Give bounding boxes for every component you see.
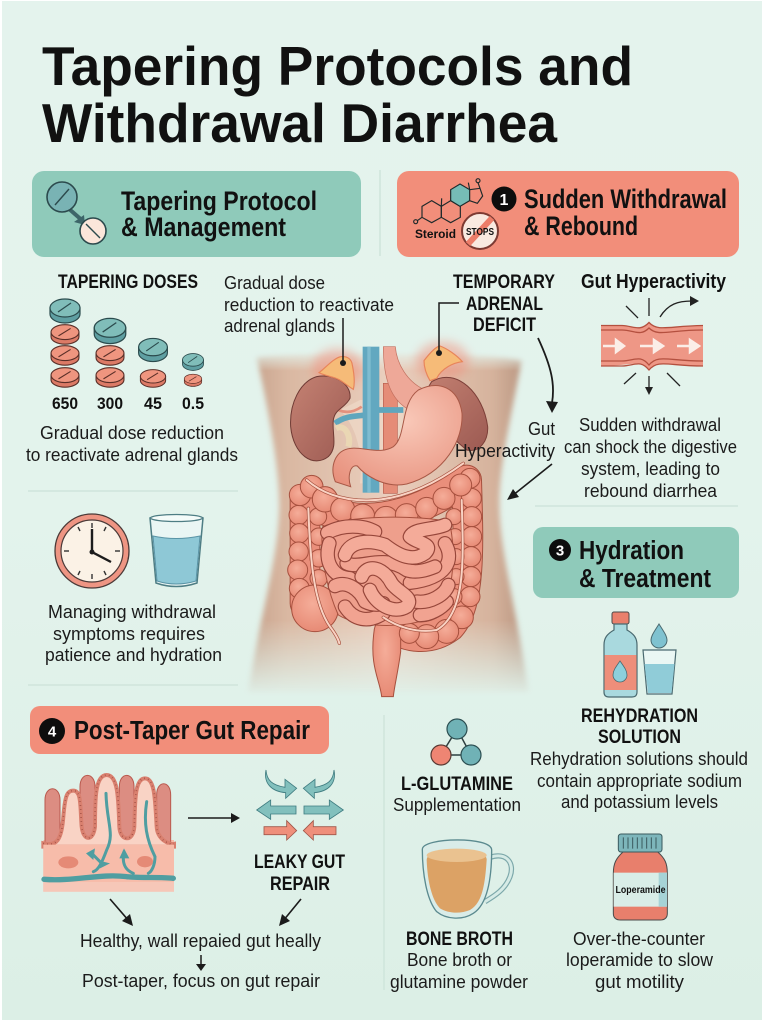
- leaky gut repair label: [254, 851, 345, 895]
- anatomy illustration: torso with organs: [248, 341, 528, 697]
- glutamine text: Supplementation: [393, 794, 521, 815]
- dose numbers: 300: [97, 394, 123, 413]
- bone broth text: Bone broth or: [407, 949, 512, 970]
- rehydration text: contain appropriate sodium: [537, 770, 742, 791]
- icon: hyperactive gut tube: [601, 296, 703, 395]
- title: Tapering Protocols and: [42, 35, 633, 97]
- heading text: [524, 184, 727, 241]
- rehydration text: REHYDRATION: [581, 706, 698, 727]
- dose numbers: [52, 394, 204, 413]
- withdrawal caption: [45, 601, 222, 665]
- caption: rebound diarrhea: [584, 480, 718, 501]
- caption: can shock the digestive: [564, 436, 737, 457]
- loperamide text: Over-the-counter: [573, 928, 705, 949]
- icon: rehydration bottle: [604, 612, 637, 697]
- label: gradual dose reduction: Gradual dose: [224, 272, 325, 293]
- number badge 3: [549, 539, 571, 561]
- rehydration text: Rehydration solutions should: [530, 748, 748, 769]
- withdrawal caption: patience and hydration: [45, 644, 222, 665]
- icon: repair arrows: [257, 770, 343, 840]
- heading text: Post-Taper Gut Repair: [74, 717, 310, 745]
- dose numbers: 45: [144, 394, 162, 413]
- blood vessels: [335, 347, 403, 493]
- bone broth text: glutamine powder: [390, 971, 528, 992]
- adrenal glands: [319, 346, 462, 389]
- heading: Gut Hyperactivity: [581, 271, 727, 293]
- icon: loperamide bottle: [613, 834, 667, 920]
- icon: pills shrinking: [47, 182, 106, 244]
- pill stacks: [50, 299, 204, 387]
- number badge 1: 1: [500, 192, 509, 209]
- heading text: Sudden Withdrawal: [524, 184, 727, 214]
- label: gut hyperactivity: [455, 418, 556, 461]
- number badge 4: 4: [48, 724, 57, 740]
- title: [42, 35, 633, 154]
- leaky gut repair label: LEAKY GUT: [254, 851, 345, 873]
- loperamide text: gut motility: [595, 971, 685, 992]
- bone broth text: BONE BROTH: [406, 929, 513, 950]
- number badge 3: 3: [556, 542, 564, 560]
- arrow: deficit to gut hyperactivity: [538, 338, 558, 413]
- arrow: to colon: [507, 464, 552, 500]
- leaky gut repair label: REPAIR: [270, 873, 330, 895]
- icon: glutamine molecule: [431, 719, 481, 765]
- panel header: hydration and treatment: [533, 527, 739, 598]
- arrow: villi to repair: [188, 813, 240, 823]
- heading text: & Treatment: [579, 565, 711, 593]
- panel: tapering doses: [26, 272, 238, 465]
- dose numbers: 0.5: [182, 394, 204, 413]
- taenia bands: [307, 463, 463, 643]
- arrow: down to focus: [196, 955, 206, 971]
- label: temporary adrenal deficit: [453, 271, 555, 336]
- stomach: [333, 386, 462, 487]
- icon: water glass: [150, 514, 203, 586]
- doses caption: [26, 422, 238, 465]
- rehydration text: SOLUTION: [598, 727, 681, 748]
- withdrawal caption: Managing withdrawal: [48, 601, 216, 622]
- esophagus: [383, 347, 425, 408]
- rehydration text: and potassium levels: [561, 791, 718, 812]
- caption: system, leading to: [581, 458, 720, 479]
- heading text: [579, 537, 711, 593]
- icon: glass and drop: [643, 624, 676, 694]
- small intestine: [322, 517, 453, 625]
- label: gradual dose reduction: [224, 272, 394, 336]
- colon: [288, 468, 482, 697]
- label: temporary adrenal deficit: DEFICIT: [473, 314, 536, 336]
- panel: gut hyperactivity: [564, 271, 737, 501]
- label: temporary adrenal deficit: TEMPORARY: [453, 271, 555, 293]
- icon: steroid stops: STOPS: [466, 227, 494, 238]
- doses caption: to reactivate adrenal glands: [26, 444, 238, 465]
- left kidney: [291, 376, 350, 461]
- label: temporary adrenal deficit: ADRENAL: [466, 293, 543, 315]
- icon: intestinal villi: [43, 775, 174, 892]
- heading text: & Rebound: [524, 211, 638, 241]
- icon: steroid stops: [414, 179, 498, 249]
- dose numbers: 650: [52, 394, 78, 413]
- panel: managing withdrawal: [45, 514, 222, 665]
- post-taper focus text: Post-taper, focus on gut repair: [82, 970, 320, 991]
- glutamine text: L-GLUTAMINE: [401, 774, 513, 795]
- label: gut hyperactivity: Hyperactivity: [455, 440, 556, 461]
- panel header: tapering protocol and management: [32, 171, 361, 257]
- leader line: left adrenal: [340, 318, 346, 366]
- caption: Sudden withdrawal: [579, 414, 721, 435]
- withdrawal caption: symptoms requires: [53, 623, 205, 644]
- bone broth text: [390, 929, 528, 992]
- healthy wall text: Healthy, wall repaied gut heally: [80, 930, 322, 951]
- arrows: to healthy wall: [110, 899, 301, 926]
- caption: [564, 414, 737, 501]
- icon: steroid stops: Steroid: [415, 227, 456, 241]
- label: gut hyperactivity: Gut: [528, 418, 555, 439]
- panel header: post-taper gut repair: [30, 706, 329, 754]
- heading text: Hydration: [579, 537, 684, 565]
- adrenal glow: [312, 341, 469, 388]
- number badge 4: [39, 718, 65, 744]
- doses heading: TAPERING DOSES: [58, 272, 198, 293]
- heading text: [121, 186, 317, 242]
- glutamine text: [393, 774, 521, 815]
- label: gradual dose reduction: adrenal glands: [224, 315, 335, 336]
- rehydration text: [530, 706, 748, 812]
- panel header: sudden withdrawal and rebound: [397, 171, 739, 257]
- loperamide text: [566, 928, 714, 992]
- icon: clock: [55, 514, 129, 588]
- title: Withdrawal Diarrhea: [42, 92, 557, 154]
- right kidney: [417, 377, 488, 451]
- doses caption: Gradual dose reduction: [40, 422, 224, 443]
- heading text: & Management: [121, 212, 286, 242]
- loperamide text: loperamide to slow: [566, 949, 714, 970]
- heading text: Tapering Protocol: [121, 186, 317, 216]
- torso: [248, 352, 528, 693]
- number badge 1: [492, 186, 516, 212]
- label: gradual dose reduction: reduction to reactivate: [224, 294, 394, 315]
- leader line: right adrenal: [436, 303, 459, 356]
- icon: bone broth cup: [422, 840, 511, 918]
- icon: loperamide bottle: Loperamide: [616, 884, 666, 896]
